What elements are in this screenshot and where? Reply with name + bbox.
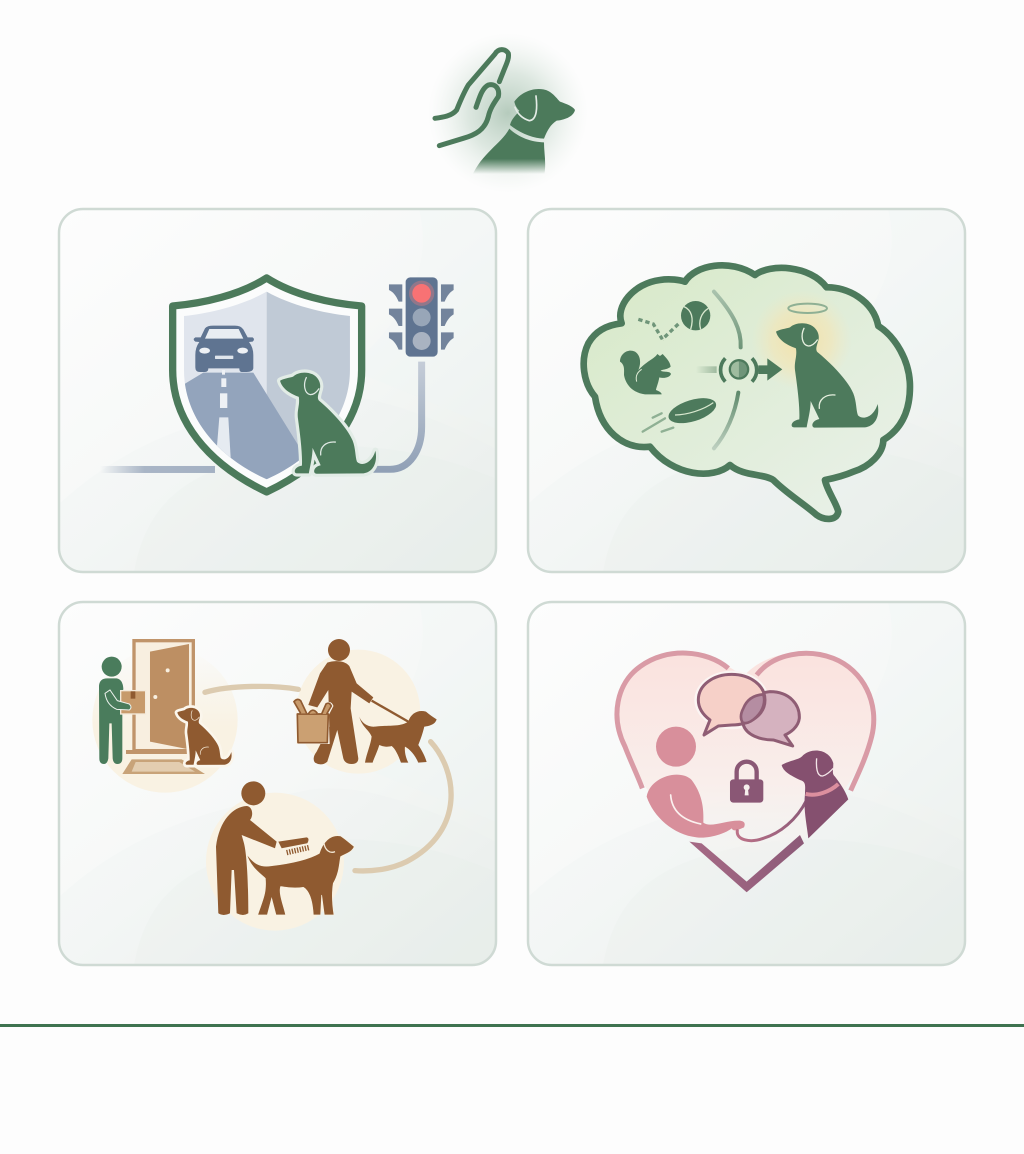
fade bar [696, 366, 717, 373]
icon: car [194, 326, 254, 372]
icon: walking dog [359, 711, 437, 763]
panel: bond and trust [528, 602, 965, 965]
cream circles [92, 647, 420, 931]
dividing arcs [714, 292, 741, 448]
icon: dog head with collar [472, 89, 575, 177]
pole from traffic light to ground [373, 362, 422, 469]
shield [173, 278, 362, 492]
icon: frisbee [643, 393, 719, 432]
icon: traffic light [389, 277, 454, 357]
icon: hand stop signal and dog [428, 33, 588, 193]
connector arcs [205, 686, 451, 871]
panel: daily routines [59, 602, 496, 965]
icon: raised hand outline [435, 50, 509, 146]
icon: tennis ball [681, 301, 710, 330]
speech bubbles [694, 671, 799, 746]
icon: padlock [730, 762, 763, 803]
icon: courier with package [99, 657, 146, 764]
icon: sitting dog [280, 373, 376, 474]
icon: focus button with arrow [721, 358, 782, 382]
icon: sitting dog at door [177, 708, 232, 765]
icon: person grooming [216, 781, 310, 915]
icon: walker with groceries [294, 639, 410, 764]
brain cloud [584, 265, 910, 519]
heart fill [617, 653, 874, 890]
yellow glow [752, 290, 852, 390]
footer divider [0, 1024, 1024, 1027]
dashed paths [638, 319, 678, 339]
icon: standing dog [247, 836, 354, 915]
icon: door and mat [122, 641, 205, 774]
halo ring [788, 304, 827, 313]
road line left [100, 466, 215, 473]
icon: sitting dog with halo [776, 323, 878, 428]
icon: squirrel [620, 351, 671, 394]
leash [737, 800, 807, 841]
icon: person [647, 727, 745, 838]
heart outline [617, 653, 874, 791]
panel: thought bubble focus [528, 209, 965, 572]
panel: road safety [59, 209, 496, 572]
heart bottom point [689, 835, 804, 892]
icon: dog bust [782, 750, 848, 838]
